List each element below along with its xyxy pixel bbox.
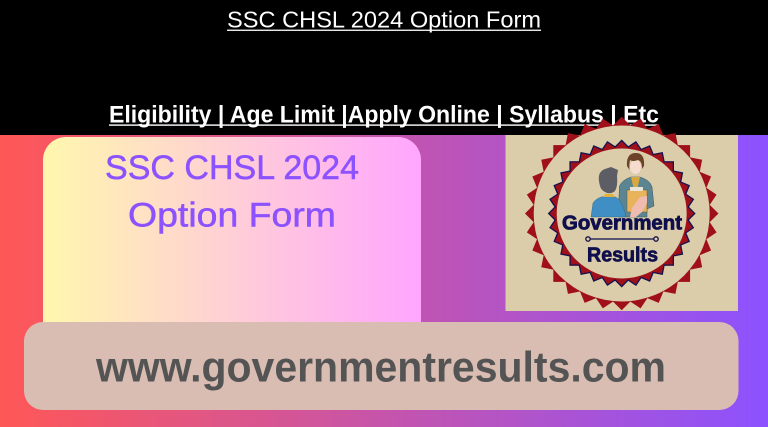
card title line 2: Option Form xyxy=(128,196,336,234)
seal outer serrated ring xyxy=(525,117,718,310)
gradient background xyxy=(0,135,768,427)
icon: back man in blue shirt xyxy=(591,167,647,217)
panel: option form card xyxy=(43,137,421,377)
header subtitle: Eligibility | Age Limit |Apply Online | Syllabus | Etc xyxy=(109,102,659,128)
seal text: Government: Government xyxy=(562,212,682,234)
panel: website bar xyxy=(24,322,738,410)
header title: SSC CHSL 2024 Option Form xyxy=(227,6,541,32)
panel: logo background xyxy=(506,135,738,311)
black header band xyxy=(0,0,768,135)
seal divider xyxy=(586,237,658,241)
icon: government results seal xyxy=(525,117,718,310)
icon: front man with clipboard xyxy=(618,153,654,217)
seal inner navy serrated ring xyxy=(548,140,696,287)
website url: www.governmentresults.com xyxy=(95,344,666,392)
card title line 1: SSC CHSL 2024 xyxy=(105,149,359,187)
seal inner red serrated ring xyxy=(550,141,694,286)
seal text: Results: Results xyxy=(587,244,658,266)
